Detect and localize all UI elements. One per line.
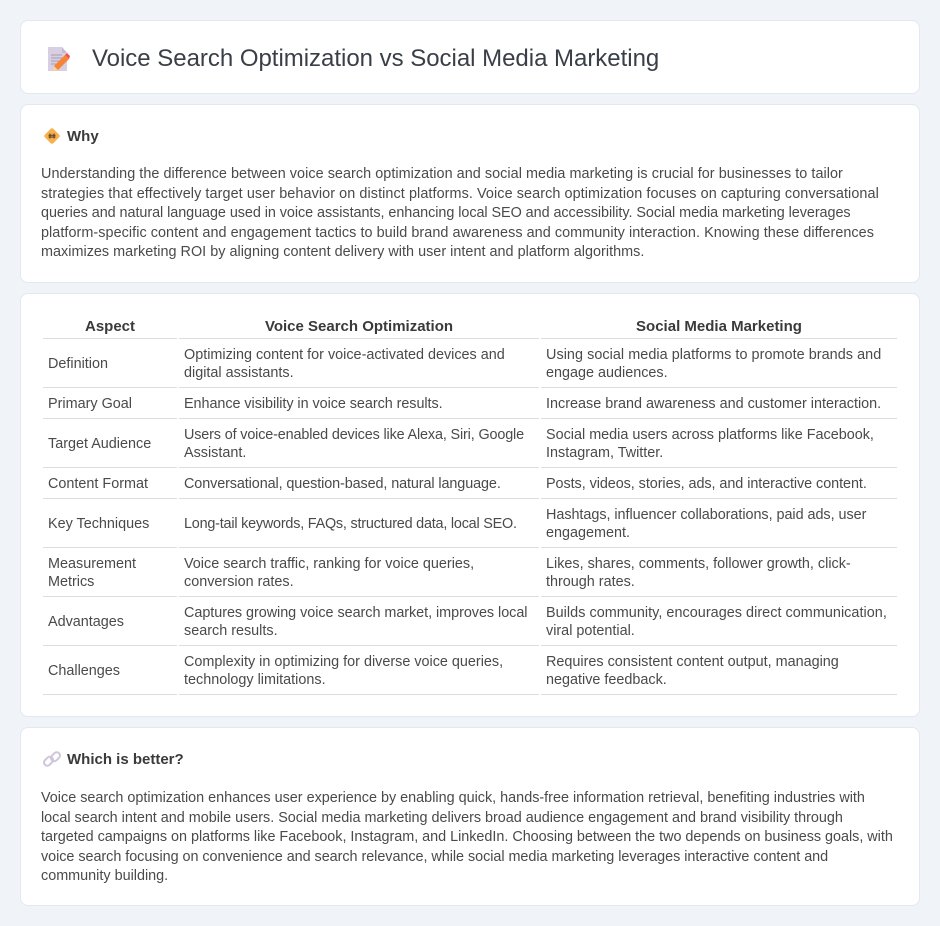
comparison table: Posts, videos, stories, ads, and interactive content.: [546, 476, 867, 492]
icon: document with pencil: [48, 47, 70, 71]
text block: which is better: targeted campaigns on platforms like Facebook, Instagram, and LinkedIn. Choosing between the two depends on business goals, with: [41, 829, 893, 845]
comparison table: through rates.: [546, 574, 635, 590]
text block: why: strategies that effectively target user behavior on distinct platforms. Voice search optimization focuses on capturing conversational: [41, 186, 879, 202]
text block: which is better: voice search focusing on convenience and search relevance, while social media marketing leverages interactive content and: [41, 849, 828, 865]
comparison table: Voice search traffic, ranking for voice queries,: [184, 556, 474, 572]
icon: chain link: [43, 751, 61, 767]
panel: why: [20, 104, 920, 283]
text block: why: queries and natural language used in voice assistants, enhancing local SEO and accessibility. Social media marketing leverages: [41, 205, 851, 221]
comparison table: technology limitations.: [184, 672, 326, 688]
text block: why: [41, 166, 879, 260]
heading: why: Why: [67, 128, 99, 145]
comparison table: Target Audience: [48, 436, 151, 452]
text block: which is better: local search intent and mobile users. Social media marketing delivers broad audience engagement and brand visibility through: [41, 810, 843, 826]
comparison table: conversion rates.: [184, 574, 294, 590]
comparison table: Social Media Marketing: [636, 318, 802, 335]
comparison table: Increase brand awareness and customer interaction.: [546, 396, 881, 412]
comparison table: Complexity in optimizing for diverse voice queries,: [184, 654, 503, 670]
comparison table: Assistant.: [184, 445, 246, 461]
comparison table: Key Techniques: [48, 516, 149, 532]
comparison table: Using social media platforms to promote brands and: [546, 347, 881, 363]
text block: why: platform-specific content and engagement tactics to build brand awareness and community interaction. Knowing these differences: [41, 225, 874, 241]
comparison table: Social media users across platforms like Facebook,: [546, 427, 874, 443]
comparison table: Primary Goal: [48, 396, 132, 412]
comparison table: Users of voice-enabled devices like Alexa, Siri, Google: [184, 427, 524, 443]
comparison table: Builds community, encourages direct communication,: [546, 605, 887, 621]
title: Voice Search Optimization vs Social Media Marketing: [92, 45, 659, 72]
text block: which is better: Voice search optimization enhances user experience by enabling quick, hands-free information retrieval, benefiting industries with: [41, 790, 865, 806]
comparison table: Definition: [48, 356, 108, 372]
text block: which is better: community building.: [41, 868, 168, 884]
comparison table: Conversational, question-based, natural language.: [184, 476, 501, 492]
panel: title card: [20, 20, 920, 94]
comparison table: Enhance visibility in voice search results.: [184, 396, 443, 412]
text block: why: maximizes marketing ROI by aligning content delivery with user intent and platform algorithms.: [41, 244, 644, 260]
heading: which is better: Which is better?: [67, 751, 184, 768]
comparison table: engagement.: [546, 525, 630, 541]
comparison table: Optimizing content for voice-activated devices and: [184, 347, 505, 363]
comparison table: Instagram, Twitter.: [546, 445, 663, 461]
comparison table: [43, 318, 897, 695]
comparison table: engage audiences.: [546, 365, 668, 381]
comparison table: digital assistants.: [184, 365, 294, 381]
comparison table: negative feedback.: [546, 672, 667, 688]
text block: which is better: [41, 790, 893, 884]
icon: warning diamond: [44, 128, 60, 144]
comparison table: Measurement: [48, 556, 136, 572]
comparison table: viral potential.: [546, 623, 635, 639]
comparison table: Advantages: [48, 614, 124, 630]
comparison table: search results.: [184, 623, 278, 639]
comparison table: Long-tail keywords, FAQs, structured data, local SEO.: [184, 516, 517, 532]
comparison table: Likes, shares, comments, follower growth, click-: [546, 556, 851, 572]
text block: why: Understanding the difference between voice search optimization and social media marketing is crucial for businesses to tailor: [41, 166, 843, 182]
comparison table: Challenges: [48, 663, 120, 679]
panel: comparison table: [20, 293, 920, 717]
comparison table: Voice Search Optimization: [265, 318, 453, 335]
comparison table: Content Format: [48, 476, 148, 492]
panel: which is better: [20, 727, 920, 906]
comparison table: Requires consistent content output, managing: [546, 654, 839, 670]
comparison table: Metrics: [48, 574, 94, 590]
comparison table: Captures growing voice search market, improves local: [184, 605, 527, 621]
comparison table: Aspect: [85, 318, 135, 335]
comparison table: Hashtags, influencer collaborations, paid ads, user: [546, 507, 866, 523]
